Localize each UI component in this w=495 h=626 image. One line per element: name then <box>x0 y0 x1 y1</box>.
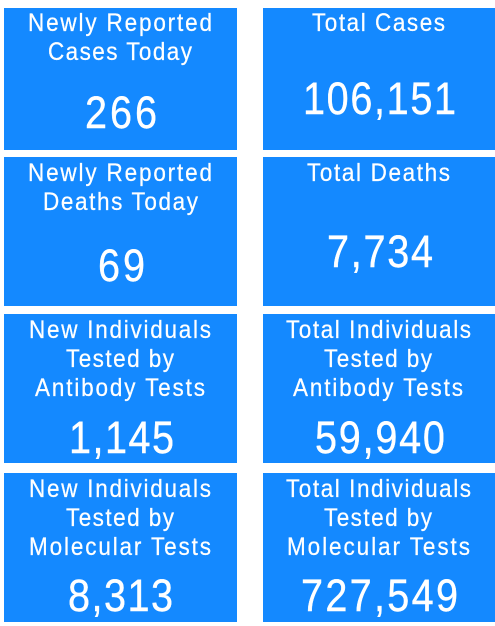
heading: new individuals tested by antibody tests: Tested by <box>66 345 174 373</box>
heading: total individuals tested by molecular tests: Total Individuals <box>286 475 471 503</box>
heading: total individuals tested by antibody tests <box>286 316 471 402</box>
number: 8,313: 8,313 <box>68 571 173 621</box>
panel: total individuals tested by molecular tests <box>263 473 495 622</box>
panel: total deaths <box>263 157 495 306</box>
number: 106,151: 106,151 <box>303 74 456 124</box>
heading: newly reported cases today <box>28 9 212 66</box>
heading: total individuals tested by antibody tests: Antibody Tests <box>293 374 463 402</box>
heading: new individuals tested by antibody tests: Antibody Tests <box>35 374 205 402</box>
heading: new individuals tested by antibody tests: New Individuals <box>29 316 211 344</box>
heading: new individuals tested by molecular tests <box>29 475 211 561</box>
number: 266: 266 <box>85 88 157 138</box>
panel: total cases <box>263 8 495 150</box>
heading: newly reported deaths today: Deaths Today <box>43 188 198 216</box>
heading: total individuals tested by antibody tests: Total Individuals <box>286 316 471 344</box>
panel: total individuals tested by antibody tests <box>263 314 495 463</box>
heading: new individuals tested by molecular tests: Molecular Tests <box>29 533 211 561</box>
heading: total individuals tested by molecular tests <box>286 475 471 561</box>
heading: new individuals tested by molecular tests: Tested by <box>66 504 174 532</box>
number: 1,145: 1,145 <box>69 413 174 463</box>
panel: newly reported deaths today <box>4 157 237 306</box>
heading: newly reported cases today: Newly Reported <box>28 9 212 37</box>
heading: newly reported deaths today: Newly Reported <box>28 159 212 187</box>
number: 7,734: 7,734 <box>327 227 433 277</box>
heading: new individuals tested by antibody tests <box>29 316 211 402</box>
heading: new individuals tested by molecular tests: New Individuals <box>29 475 211 503</box>
number: 727,549: 727,549 <box>301 571 458 621</box>
panel: new individuals tested by molecular tests <box>4 473 237 622</box>
number: 69: 69 <box>98 241 145 291</box>
number: 59,940: 59,940 <box>315 413 445 463</box>
heading: newly reported deaths today <box>28 159 212 216</box>
heading: total individuals tested by molecular tests: Molecular Tests <box>287 533 470 561</box>
heading: total cases: Total Cases <box>312 9 445 37</box>
panel: new individuals tested by antibody tests <box>4 314 237 463</box>
heading: total individuals tested by antibody tests: Tested by <box>324 345 432 373</box>
panel: newly reported cases today <box>4 8 237 150</box>
heading: newly reported cases today: Cases Today <box>48 38 192 66</box>
heading: total deaths: Total Deaths <box>307 159 450 187</box>
heading: total individuals tested by molecular tests: Tested by <box>324 504 432 532</box>
